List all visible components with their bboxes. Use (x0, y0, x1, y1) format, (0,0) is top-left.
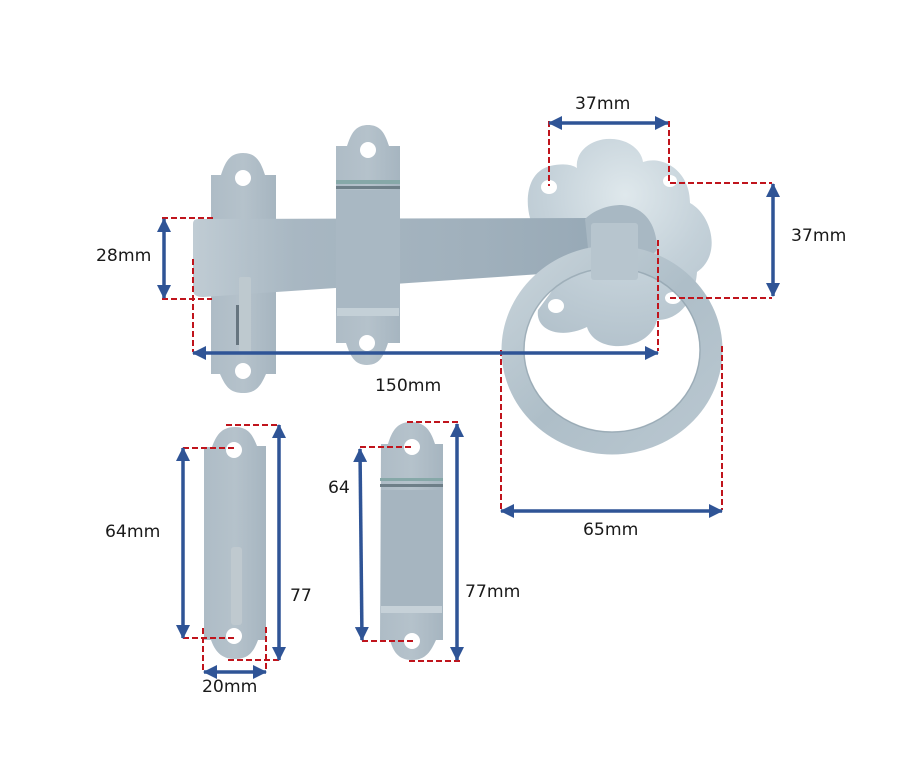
dimension labels: 28mm (96, 246, 151, 266)
dimension labels: 37mm (791, 226, 846, 246)
rear clip plate (336, 125, 400, 365)
dimension labels: 77mm (465, 582, 520, 602)
dimension labels: 64 (328, 478, 350, 498)
strap over bar (336, 180, 400, 316)
latch catch (236, 277, 251, 352)
detail keep plate (204, 427, 266, 659)
pivot post (591, 223, 638, 280)
rear keep plate (211, 153, 276, 393)
detail clip plate (380, 422, 443, 660)
boss around pivot (585, 205, 657, 268)
ring handle (513, 257, 711, 443)
latch bar (193, 218, 600, 297)
dimension labels: 65mm (583, 520, 638, 540)
dimension labels (96, 94, 846, 697)
keep plate holes (235, 170, 251, 379)
blue dimension arrows (164, 123, 773, 672)
rosette back plate (528, 139, 712, 346)
dimension labels: 64mm (105, 522, 160, 542)
dimension labels: 77 (290, 586, 312, 606)
dimension labels: 37mm (575, 94, 630, 114)
ring inner shadow (524, 268, 700, 432)
dimension labels: 20mm (202, 677, 257, 697)
dimension labels: 150mm (375, 376, 441, 396)
red dashed extension lines (162, 121, 772, 672)
rosette holes (541, 175, 681, 313)
catch on keep plate (231, 547, 242, 625)
